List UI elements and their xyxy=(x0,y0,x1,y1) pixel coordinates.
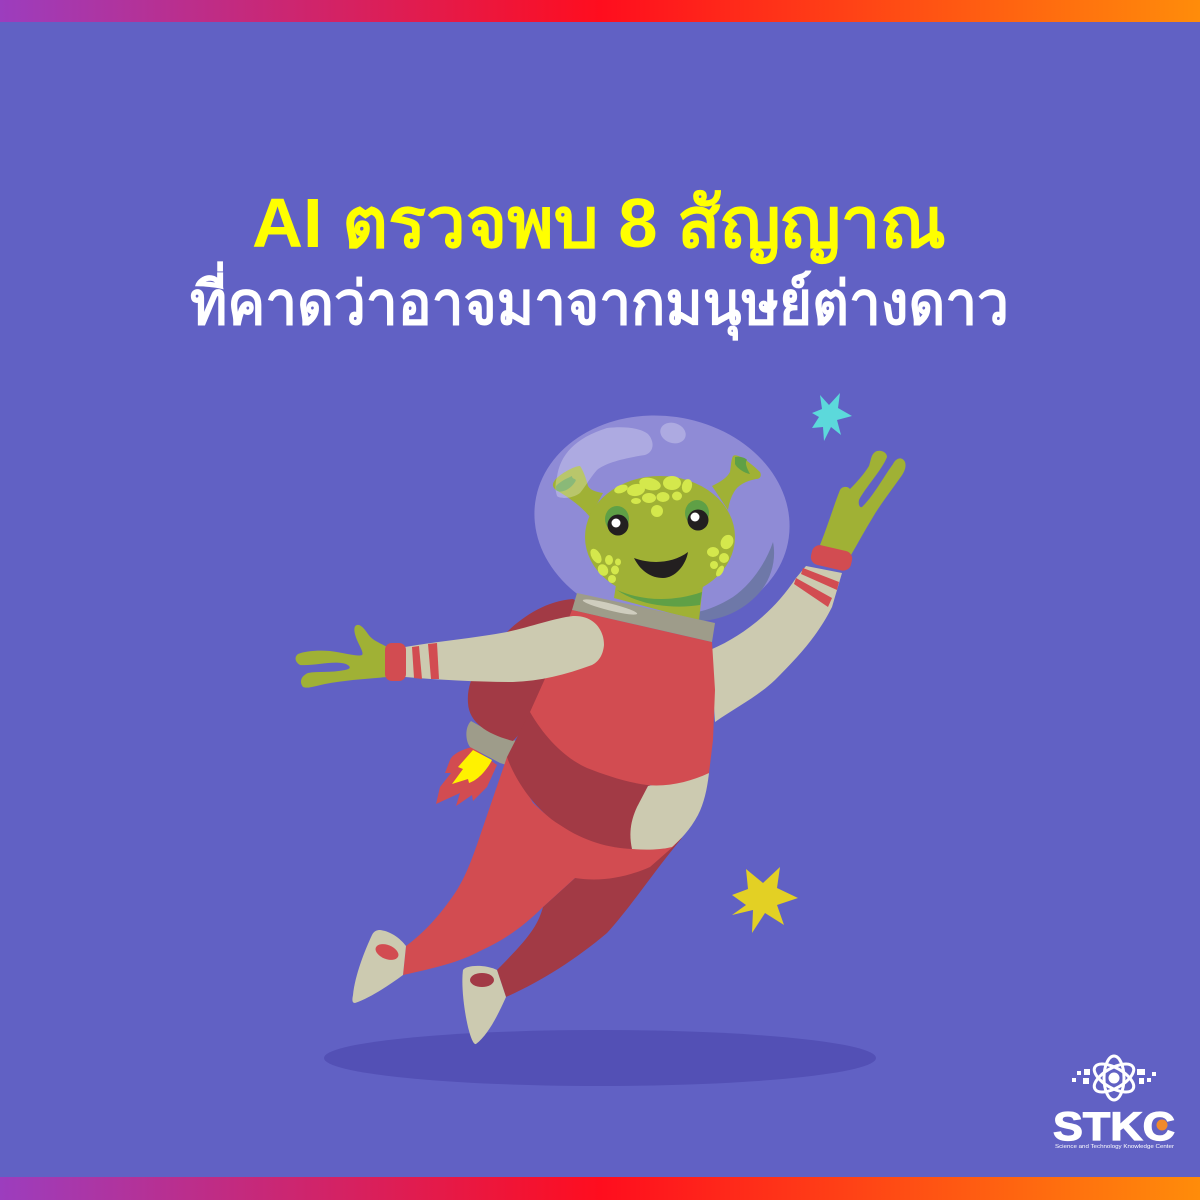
right arm sleeve xyxy=(710,566,842,722)
bottom gradient bar xyxy=(0,1177,1200,1200)
left cheek spots xyxy=(588,547,621,583)
torso dark band xyxy=(507,712,650,849)
left arm sleeve xyxy=(405,616,604,682)
right cuff xyxy=(809,544,854,572)
title line 2: ที่คาดว่าอาจมาจากมนุษย์ต่างดาว xyxy=(190,261,1009,341)
neck xyxy=(614,585,703,620)
torso red xyxy=(530,610,715,785)
mouth xyxy=(634,552,688,578)
helmet small highlight xyxy=(658,419,688,447)
left eye xyxy=(605,506,629,536)
sleeve stripes xyxy=(801,568,839,590)
front leg xyxy=(403,757,675,975)
icon: yellow star xyxy=(732,867,798,933)
right eye xyxy=(685,500,709,530)
logo atom icon xyxy=(1090,1056,1138,1100)
left ear xyxy=(553,466,603,517)
illustration: alien astronaut xyxy=(296,399,906,1044)
sleeve stripes xyxy=(412,646,422,679)
helmet reflection crescent xyxy=(697,542,774,621)
left cuff xyxy=(385,643,406,681)
head shape xyxy=(585,476,735,598)
alien head xyxy=(553,455,761,598)
torso xyxy=(507,610,715,850)
back leg xyxy=(497,838,682,997)
hip panel xyxy=(630,773,709,850)
logo pixel squares xyxy=(1072,1069,1156,1084)
logo tagline: Science and Technology Knowledge Center xyxy=(1055,1144,1174,1150)
ground shadow xyxy=(324,1030,876,1086)
helmet glass xyxy=(521,399,803,641)
forehead spots xyxy=(613,476,694,517)
collar xyxy=(572,593,715,642)
title line 1: AI ตรวจพบ 8 สัญญาณ xyxy=(252,184,946,265)
title xyxy=(190,184,1009,341)
left hand xyxy=(296,625,387,688)
jetpack nozzle xyxy=(466,721,516,766)
top gradient bar xyxy=(0,0,1200,22)
icon: cyan star xyxy=(812,393,852,441)
right hand xyxy=(820,451,906,555)
logo orange dot xyxy=(1156,1120,1168,1130)
left boot xyxy=(352,930,406,1003)
jet flame xyxy=(436,747,497,806)
logo: STKC xyxy=(1053,1056,1175,1150)
right ear xyxy=(712,455,761,510)
jetpack xyxy=(468,599,605,741)
logo wordmark: STKC xyxy=(1053,1105,1175,1149)
right cheek spots xyxy=(707,533,736,578)
right boot xyxy=(462,966,506,1044)
helmet highlight xyxy=(556,427,653,498)
